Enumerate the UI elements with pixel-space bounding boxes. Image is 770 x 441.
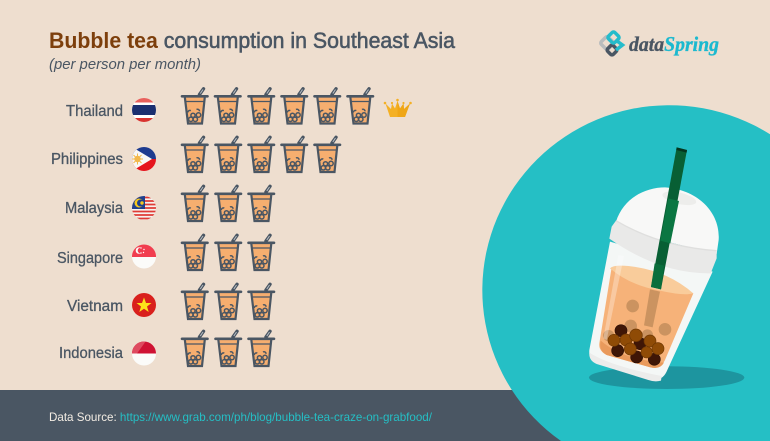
icon: crown — [384, 99, 412, 117]
flag: Indonesia — [132, 341, 156, 366]
label: Singapore: Singapore — [57, 250, 123, 267]
illustration: bubble tea cup — [589, 147, 744, 389]
bubble tea icons: 5 — [182, 137, 340, 172]
cup shadow — [589, 366, 744, 389]
bubble tea icons: 6 — [182, 89, 373, 124]
pearls — [608, 325, 664, 365]
tea bottom shade — [600, 341, 664, 368]
logo wordmark: dataSpring — [629, 32, 719, 56]
row: Thailand — [66, 89, 412, 124]
cup base rim — [589, 353, 662, 381]
row: Philippines — [51, 137, 340, 172]
teal circle — [482, 105, 770, 441]
lid hole — [661, 189, 697, 208]
submerged straw — [644, 289, 660, 327]
flag: Thailand — [132, 98, 156, 122]
row: Malaysia — [65, 186, 274, 221]
label: Indonesia: Indonesia — [59, 345, 123, 362]
label: Thailand: Thailand — [66, 103, 123, 120]
straw — [651, 147, 687, 289]
row: Indonesia — [59, 331, 274, 366]
tea — [599, 267, 693, 368]
flag: Vietnam — [132, 293, 156, 317]
bubble tea icons: 3 — [182, 186, 274, 221]
flag: Malaysia — [132, 196, 156, 220]
label: Vietnam: Vietnam — [67, 298, 123, 315]
logo: dataSpring — [600, 31, 719, 56]
tea surface — [610, 266, 693, 294]
logo icon — [600, 31, 622, 56]
cup body — [589, 242, 713, 379]
row: Vietnam — [67, 284, 274, 319]
flag: Singapore — [132, 244, 156, 269]
bubble tea icons: 3 — [182, 331, 274, 366]
flag: Philippines — [132, 147, 156, 171]
lid band — [609, 221, 717, 273]
lid band edges — [616, 221, 717, 251]
title: Bubble tea consumption in Southeast Asia — [49, 28, 456, 53]
row: Singapore — [57, 235, 274, 270]
data source: Data Source: https://www.grab.com/ph/blog/bubble-tea-craze-on-grabfood/ — [49, 410, 433, 424]
subtitle: (per person per month) — [49, 57, 201, 73]
bubble tea icons: 3 — [182, 235, 274, 270]
label: Philippines: Philippines — [51, 151, 123, 168]
footer band — [0, 390, 770, 441]
label: Malaysia: Malaysia — [65, 200, 123, 217]
lid dome — [613, 187, 719, 254]
submerged pearls — [603, 300, 671, 341]
bubble tea icons: 3 — [182, 284, 274, 319]
cup glare — [603, 255, 624, 340]
